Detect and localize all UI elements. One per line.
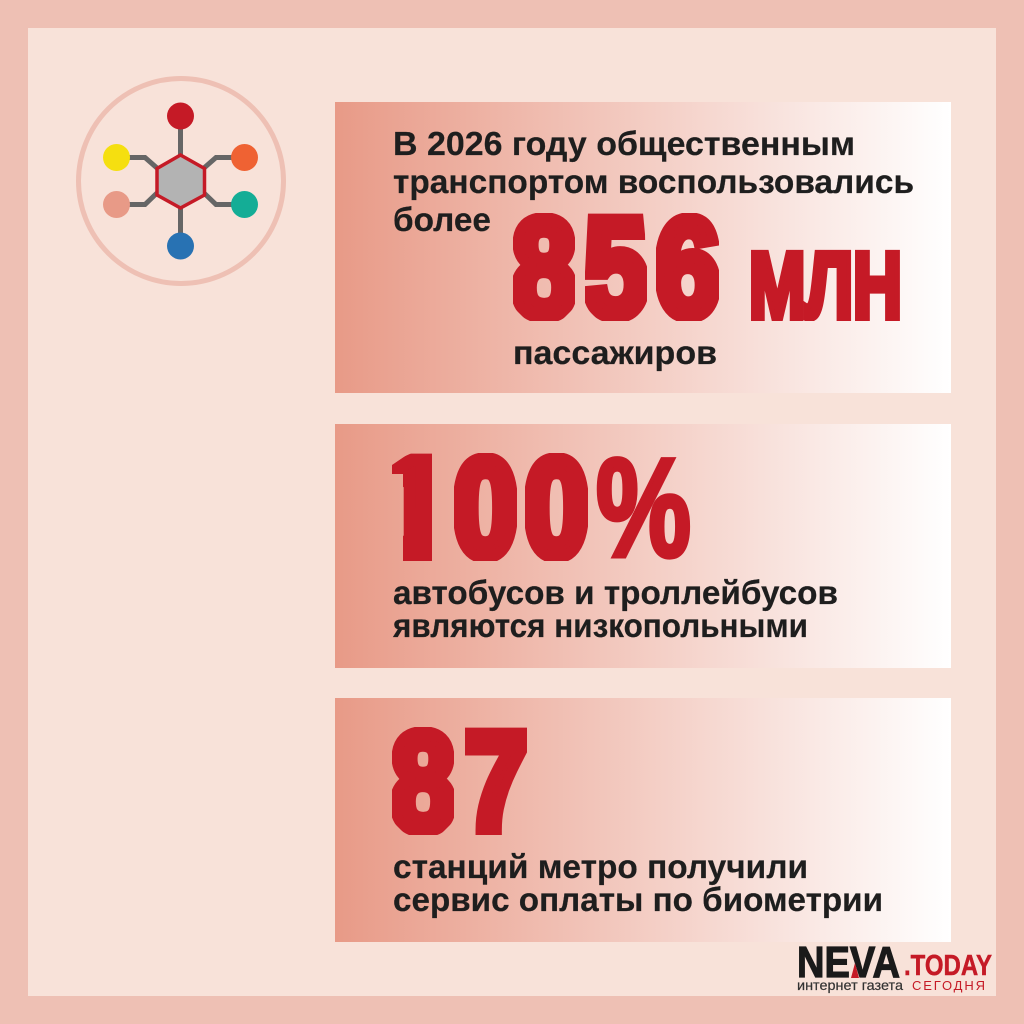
passengers label: пассажиров xyxy=(513,334,717,371)
big number: 100%: 0 xyxy=(453,429,518,586)
intro text: В 2026 году общественным xyxy=(393,125,855,162)
panel: 100 percent low-floor xyxy=(335,424,951,668)
big number: 856: 8 xyxy=(512,189,576,346)
panel: 87 metro stations xyxy=(335,698,951,942)
logo: NEVA.TODAY: интернет газета xyxy=(797,977,903,993)
big number: 100%: % xyxy=(596,429,691,586)
big number: 100%: 1 xyxy=(378,429,453,586)
big number: 100% xyxy=(392,453,690,561)
big number: 87: 7 xyxy=(464,703,528,860)
big number: 87 xyxy=(392,727,527,835)
low-floor text: являются низкопольными xyxy=(392,607,808,644)
low-floor text: автобусов и троллейбусов xyxy=(393,574,838,611)
logo: NEVA.TODAY: NEVA xyxy=(797,938,900,987)
metro text: сервис оплаты по биометрии xyxy=(393,881,883,918)
big number: 100%: 0 xyxy=(524,429,589,586)
icon: transport network hub xyxy=(78,78,284,284)
big unit: млн: МЛН xyxy=(749,233,902,338)
big number: 856: 5 xyxy=(584,189,648,346)
panel: 856 million passengers xyxy=(335,102,951,393)
big number: 87: 8 xyxy=(391,703,455,860)
big number: 856: 6 xyxy=(655,189,720,346)
big number: 856 xyxy=(513,213,719,321)
logo: NEVA.TODAY: .TODAY xyxy=(904,950,992,982)
metro text xyxy=(393,848,883,918)
low-floor text xyxy=(392,574,838,644)
intro text xyxy=(393,125,914,238)
intro text: более xyxy=(393,201,491,238)
intro text: транспортом воспользовались xyxy=(393,163,914,200)
logo: NEVA.TODAY: СЕГОДНЯ xyxy=(912,978,985,993)
logo: NEVA.TODAY xyxy=(797,938,992,993)
metro text: станций метро получили xyxy=(393,848,808,885)
